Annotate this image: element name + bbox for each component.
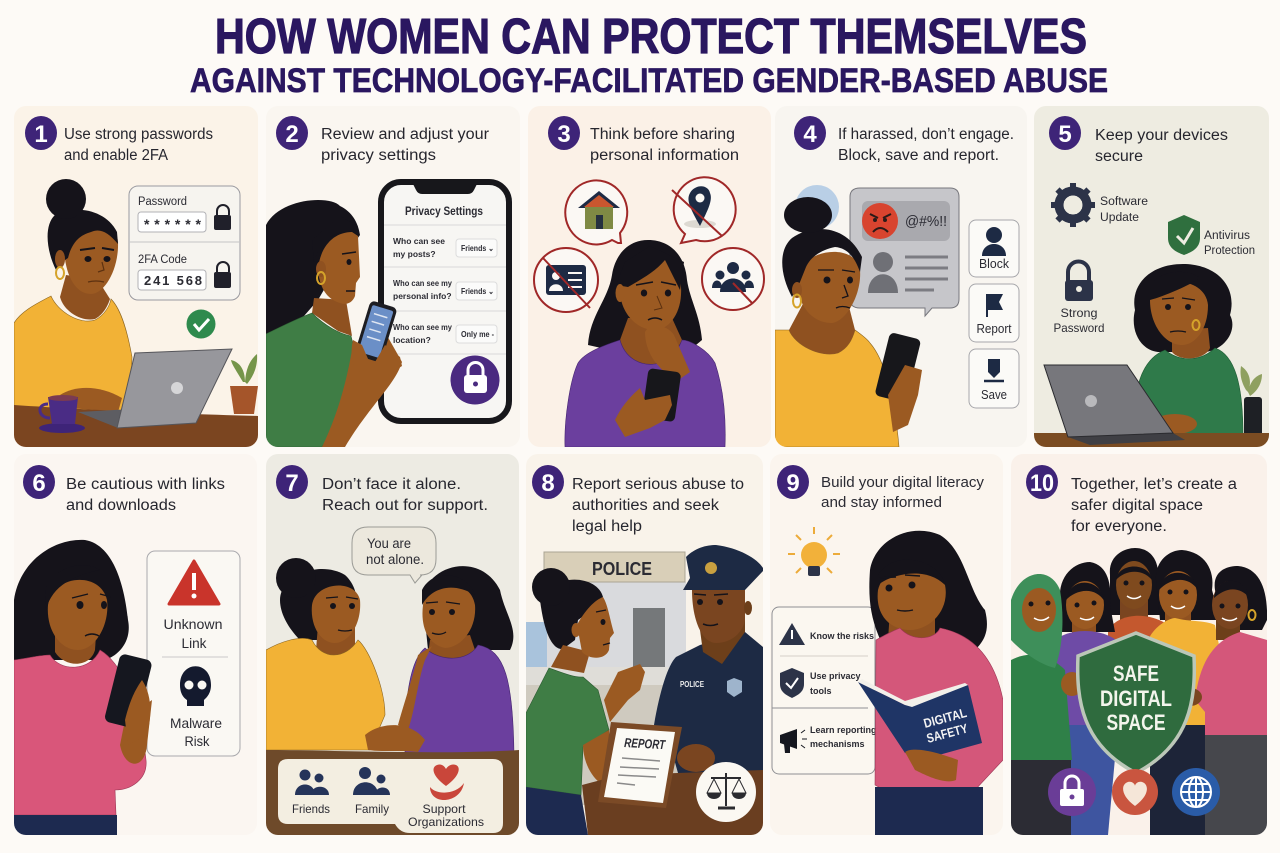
- step 9 heading: [777, 465, 985, 511]
- step 3 heading: personal information: [590, 147, 739, 164]
- panel 9: digital literacy: [770, 454, 1003, 837]
- step 10 heading: for everyone.: [1071, 518, 1167, 535]
- password card: 2FA Code: [138, 254, 187, 266]
- large phone with privacy settings: Who can see my: [393, 322, 452, 332]
- title: HOW WOMEN CAN PROTECT THEMSELVES: [215, 10, 1087, 64]
- step 4 heading: [794, 116, 1014, 164]
- password card: [129, 186, 240, 300]
- woman reading book: SAFETY: [925, 720, 970, 746]
- tips card: Know the risks: [810, 631, 874, 641]
- abusive message bubble: @#%!!: [905, 213, 947, 230]
- warning card: Unknown: [164, 616, 222, 632]
- icon: light bulb: [788, 527, 840, 576]
- police building: [526, 552, 686, 805]
- step 5 heading: secure: [1095, 148, 1143, 165]
- large phone with privacy settings: personal info?: [393, 291, 452, 301]
- step 10 heading: [1026, 465, 1237, 535]
- woman in purple: [1055, 562, 1118, 835]
- button: Block: [969, 220, 1019, 277]
- woman in orange (back): [1108, 548, 1168, 660]
- coffee cup: [39, 395, 85, 433]
- step 6 heading: Be cautious with links: [66, 476, 225, 493]
- worried woman in purple sweater: [565, 240, 725, 447]
- step 8 heading: authorities and seek: [572, 497, 719, 514]
- woman in pink sweater with phone: [14, 540, 153, 835]
- title: [190, 10, 1108, 100]
- support options card: [278, 759, 503, 833]
- step 4 heading: If harassed, don’t engage.: [838, 126, 1014, 143]
- step 6 heading: 6: [32, 470, 46, 497]
- large phone with privacy settings: location?: [393, 335, 431, 345]
- icon: scales of justice: [696, 762, 756, 822]
- button: Save: [969, 349, 1019, 408]
- icon: strong password lock: Strong: [1060, 306, 1098, 320]
- bubble: people: [702, 248, 764, 310]
- icon: gear software update: Software: [1100, 196, 1148, 208]
- woman in green sweater: [1132, 264, 1243, 435]
- title: AGAINST TECHNOLOGY-FACILITATED GENDER-BASED ABUSE: [190, 62, 1108, 100]
- warning card: [147, 551, 240, 756]
- step 10 heading: 10: [1030, 470, 1054, 497]
- laptop: [1044, 365, 1185, 445]
- button: Report: [969, 284, 1019, 342]
- icon: purple lock: [450, 356, 500, 404]
- step 5 heading: [1049, 116, 1228, 165]
- step 8 heading: [532, 465, 744, 535]
- large phone with privacy settings: Friends ⌄: [461, 286, 494, 296]
- step 6 heading: and downloads: [66, 497, 176, 514]
- icon: gear software update: Update: [1100, 212, 1139, 224]
- police officer: POLICE: [680, 680, 705, 689]
- password card: 241 568: [144, 273, 202, 288]
- police building: POLICE: [592, 559, 652, 579]
- button: Report: Report: [976, 322, 1012, 336]
- step 2 heading: privacy settings: [321, 147, 436, 164]
- step 9 heading: Build your digital literacy: [821, 475, 985, 491]
- tips card: [772, 607, 877, 774]
- icon: antivirus shield: Antivirus: [1204, 230, 1250, 242]
- large phone with privacy settings: my posts?: [393, 249, 436, 259]
- step 1 heading: 1: [34, 121, 48, 148]
- tips card: Learn reporting: [810, 725, 877, 735]
- police officer: [654, 545, 764, 780]
- desk: [14, 405, 258, 447]
- woman in hijab: [1011, 574, 1083, 835]
- panel 5: secure devices: [1034, 106, 1269, 447]
- shield: safe digital space: [1078, 633, 1194, 773]
- step 5 heading: 5: [1058, 121, 1072, 148]
- panel 10: safer digital space: [1011, 454, 1267, 835]
- panel 4: block save report: [775, 106, 1027, 447]
- woman in yellow: [1148, 550, 1222, 835]
- icon: antivirus shield: Protection: [1204, 245, 1255, 257]
- woman in green shirt with phone: [266, 200, 402, 447]
- icon: lock badge: [1048, 768, 1096, 816]
- password card: ******: [144, 216, 202, 232]
- step 1 heading: and enable 2FA: [64, 147, 169, 164]
- icon: gear software update: [1051, 183, 1148, 227]
- plant and chair: [1241, 366, 1262, 437]
- step 4 heading: Block, save and report.: [838, 147, 999, 164]
- panel 1: strong passwords: [14, 106, 258, 447]
- woman in purple: [405, 566, 514, 755]
- warning card: Malware: [170, 715, 222, 731]
- icon: globe badge: [1172, 768, 1220, 816]
- step 7 heading: Reach out for support.: [322, 497, 488, 514]
- woman reading book: [858, 531, 1003, 837]
- woman with yellow sweater holding phone: [775, 197, 922, 447]
- tips card: mechanisms: [810, 739, 865, 749]
- password card: Password: [138, 196, 187, 208]
- desk: [582, 770, 763, 835]
- report clipboard: REPORT: [624, 735, 666, 752]
- icon: strong password lock: Password: [1054, 321, 1104, 335]
- step 6 heading: [23, 465, 225, 514]
- large phone with privacy settings: [381, 182, 509, 421]
- laptop: [78, 349, 232, 428]
- table: [266, 750, 519, 835]
- support options card: Support: [422, 802, 466, 816]
- large phone with privacy settings: Only me -: [461, 329, 494, 339]
- icon: antivirus shield: [1168, 215, 1255, 257]
- step 2 heading: Review and adjust your: [321, 126, 489, 143]
- step 7 heading: 7: [285, 470, 299, 497]
- support options card: Organizations: [408, 815, 484, 829]
- step 3 heading: [548, 116, 739, 164]
- report clipboard: [598, 722, 682, 808]
- tips card: Use privacy: [810, 671, 861, 681]
- shield: safe digital space: SAFE: [1113, 661, 1159, 686]
- large phone with privacy settings: Privacy Settings: [405, 206, 483, 218]
- icon: check mark: [186, 310, 216, 338]
- step 9 heading: and stay informed: [821, 495, 942, 511]
- large phone with privacy settings: Friends ⌄: [461, 243, 494, 253]
- woman in yellow sweater: [14, 179, 132, 420]
- woman in yellow: [266, 558, 432, 752]
- step 10 heading: Together, let’s create a: [1071, 476, 1237, 493]
- panel 7: reach out: [266, 454, 519, 835]
- abusive message bubble: [795, 185, 959, 316]
- button: Save: Save: [981, 388, 1007, 402]
- support options card: Friends: [292, 802, 330, 816]
- tips card: tools: [810, 686, 832, 696]
- button: Block: Block: [979, 257, 1010, 271]
- step 2 heading: [276, 116, 489, 164]
- panel 8: report to authorities: [526, 454, 764, 835]
- step 3 heading: 3: [557, 121, 571, 148]
- plant: [230, 354, 258, 414]
- step 8 heading: 8: [541, 470, 555, 497]
- warning card: Link: [182, 635, 207, 651]
- speech bubble: [352, 527, 436, 583]
- large phone with privacy settings: Who can see my: [393, 278, 452, 288]
- woman in green shirt: [526, 568, 645, 835]
- step 9 heading: 9: [786, 470, 800, 497]
- step 7 heading: Don’t face it alone.: [322, 476, 461, 493]
- step 8 heading: Report serious abuse to: [572, 476, 744, 493]
- step 5 heading: Keep your devices: [1095, 127, 1228, 144]
- support options card: Family: [355, 802, 389, 816]
- woman in pink: [1178, 566, 1267, 835]
- icon: strong password lock: [1054, 262, 1104, 335]
- step 10 heading: safer digital space: [1071, 497, 1203, 514]
- bubble: ID card: [534, 248, 598, 312]
- step 7 heading: [276, 465, 488, 514]
- shield: safe digital space: DIGITAL: [1100, 686, 1172, 711]
- shield: safe digital space: SPACE: [1106, 710, 1166, 735]
- panel 6: links and downloads: [14, 454, 257, 835]
- panel 3: think before sharing: [528, 106, 771, 447]
- speech bubble: You are: [367, 535, 411, 551]
- step 1 heading: [25, 116, 213, 164]
- step 4 heading: 4: [803, 121, 817, 148]
- warning card: Risk: [184, 733, 210, 749]
- bubble: location: [672, 177, 736, 243]
- icon: heart badge: [1112, 769, 1158, 815]
- large phone with privacy settings: Who can see: [393, 236, 445, 246]
- panel 2: privacy settings: [266, 106, 520, 447]
- step 2 heading: 2: [285, 121, 299, 148]
- woman reading book: DIGITAL: [922, 705, 968, 731]
- step 1 heading: Use strong passwords: [64, 126, 213, 143]
- step 3 heading: Think before sharing: [590, 126, 735, 143]
- bubble: home: [565, 180, 627, 244]
- step 8 heading: legal help: [572, 518, 642, 535]
- desk: [1034, 433, 1269, 447]
- speech bubble: not alone.: [366, 551, 424, 567]
